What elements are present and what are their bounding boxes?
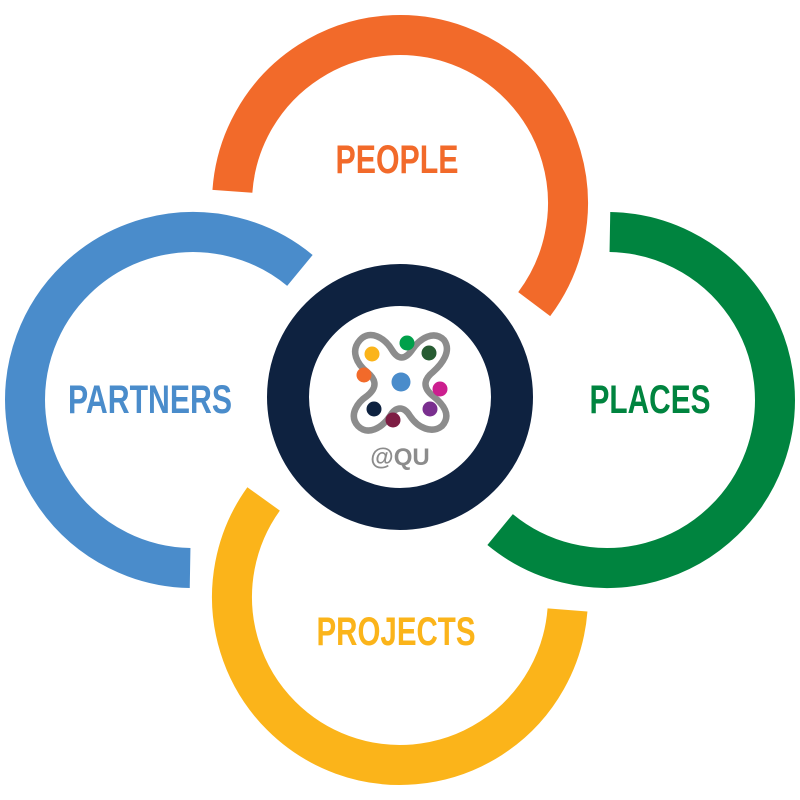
ring: partners (25, 232, 300, 568)
ring: people (232, 35, 568, 304)
logo (354, 335, 448, 471)
ring: places (500, 232, 775, 568)
label: PARTNERS: PARTNERS (68, 378, 232, 422)
logo: @QU (370, 444, 430, 471)
ring: projects (232, 499, 568, 765)
label: PEOPLE: PEOPLE (336, 138, 458, 182)
label: PLACES: PLACES (590, 378, 710, 422)
center ring (288, 285, 512, 509)
label: PROJECTS: PROJECTS (316, 610, 476, 654)
